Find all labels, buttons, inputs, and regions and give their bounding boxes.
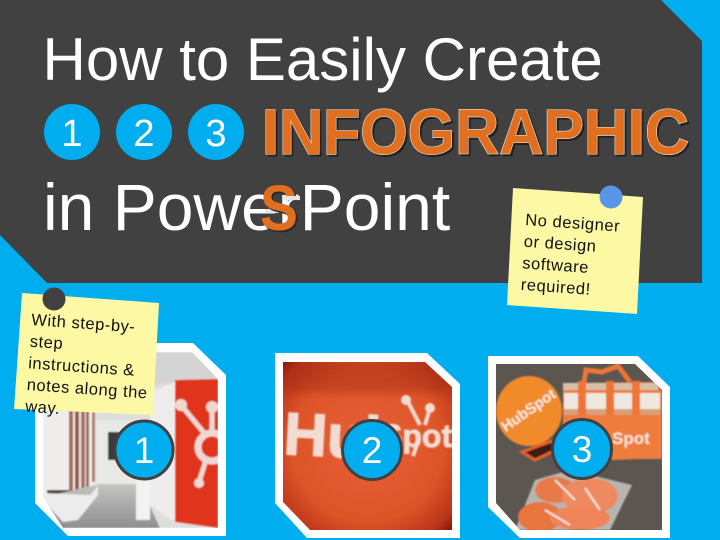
numbered circles row: 1 [61,113,83,155]
card 3: swag photo [488,356,670,538]
title line 1: How to Easily Create [42,26,603,93]
sticky note text: no designer: No designer [525,211,621,236]
card 2: shirt photo: Spot [381,418,452,454]
badge 3 [552,420,612,478]
heading: INFOGRAPHICS: S [262,174,300,246]
sticky note text: step-by-step: step [29,333,64,353]
numbered circles row [44,104,244,160]
sticky note text: step-by-step: With step-by- [31,311,136,336]
heading: INFOGRAPHICS [260,96,691,246]
badge 1 [115,421,173,479]
numbered circles row: 2 [133,113,155,155]
sticky note: step-by-step [14,288,159,415]
badge 2: 2 [362,430,382,471]
pin: blue [600,186,622,208]
title line 3: in PowerPoint [43,170,450,244]
badge 1: 1 [134,430,154,471]
sticky note text: step-by-step [24,311,153,424]
badge 2 [342,420,402,480]
heading: INFOGRAPHICS: INFOGRAPHIC [264,98,691,170]
badge 3: 3 [572,429,592,470]
sticky note: no designer [507,186,643,314]
card 3: swag photo: Spot [612,429,650,448]
card 2: shirt photo: Hub [282,400,402,473]
card 2: shirt photo [275,353,460,538]
heading: INFOGRAPHICS: INFOGRAPHIC [262,96,689,168]
sticky note text: step-by-step: instructions & [28,354,135,380]
card 1: office photo [35,343,226,536]
sticky note text: no designer: or design [523,233,597,256]
pin: dark [42,288,66,310]
sticky note text: no designer: software [522,254,590,277]
sticky note text: no designer [520,211,621,300]
sticky note text: step-by-step: way. [24,398,61,418]
sticky note text: no designer: required! [520,276,591,299]
dark title panel [0,0,702,283]
numbered circles row: 3 [205,113,227,155]
heading: INFOGRAPHICS: S [260,172,298,244]
sticky note text: step-by-step: notes along the [26,376,148,402]
card 3: swag photo: HubSpot [498,386,559,435]
